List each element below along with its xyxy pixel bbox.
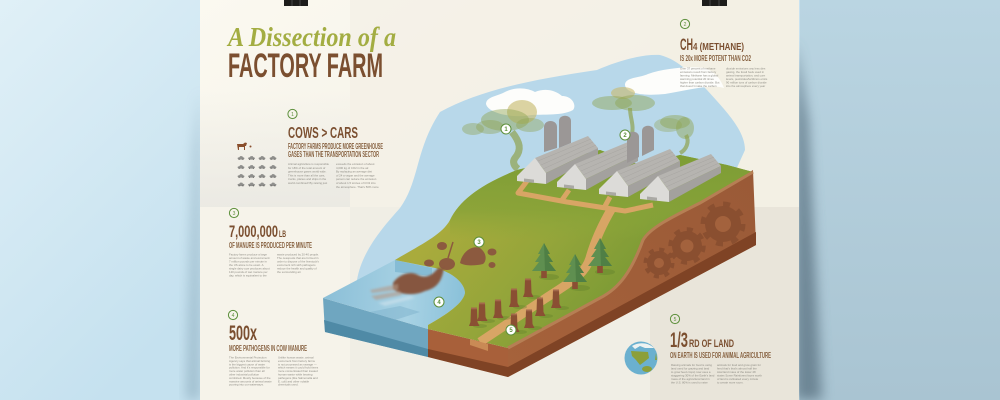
heading bbox=[680, 35, 744, 54]
section 1: cows vs cars bbox=[237, 109, 383, 189]
body text: Over 37 percent of methane bbox=[680, 66, 715, 70]
body text: order to dispose of the livestock's bbox=[277, 260, 320, 264]
gear small bbox=[646, 250, 672, 276]
marker 5 bbox=[506, 325, 516, 335]
body text: 120 pounds of wet manure per bbox=[229, 270, 268, 274]
body text: pouring into our waterways. bbox=[229, 383, 264, 387]
smoke plume 1 bbox=[462, 100, 544, 169]
blue sky blob bbox=[357, 55, 745, 300]
silo 3 bbox=[627, 132, 639, 163]
body text: chemicals used. bbox=[278, 383, 299, 387]
gears bbox=[646, 204, 743, 276]
body text: total land mass of the lower 48 bbox=[717, 370, 756, 374]
body text: more concentrated than treated bbox=[278, 369, 318, 373]
smoke plume 2 bbox=[592, 87, 655, 134]
body text: the U.S. 80% is used to raise bbox=[671, 380, 708, 384]
soil front face bbox=[428, 329, 508, 377]
body text: amount of waste and excrement: bbox=[229, 256, 270, 260]
marker 5: 5 bbox=[509, 328, 513, 334]
number badge 5: 5 bbox=[674, 317, 677, 323]
body text: is not processed as sewage — bbox=[278, 362, 317, 366]
heading bbox=[670, 329, 734, 352]
number badge 4: 4 bbox=[232, 313, 235, 319]
body text: warming potential 20 times bbox=[680, 77, 714, 81]
body text: gasing, the fossil fuels used in bbox=[726, 70, 764, 74]
body text: the US alone to be exact. A bbox=[229, 263, 264, 267]
body text: that doesn't make the carbon bbox=[680, 84, 717, 88]
title bbox=[226, 22, 396, 85]
barn 2 bbox=[557, 142, 638, 190]
body text: which means it could hold times bbox=[278, 366, 319, 370]
manure piles bbox=[424, 242, 496, 270]
body text: land used for grazing and land bbox=[671, 366, 710, 370]
barn 1 bbox=[517, 136, 598, 184]
heading: CH bbox=[680, 35, 693, 54]
body text: pollution. And it's responsible for bbox=[229, 366, 270, 370]
body text: The cesspools that are formed in bbox=[277, 256, 319, 260]
body text: Factory farms produce a large bbox=[229, 252, 267, 256]
body text: pathogens (like Salmonella and bbox=[278, 376, 318, 380]
body text bbox=[680, 66, 768, 88]
tree stumps bbox=[469, 278, 569, 334]
body text bbox=[229, 356, 319, 387]
barn 4 bbox=[640, 154, 721, 202]
body text: The Environmental Protection bbox=[229, 356, 266, 360]
title main line: FACTORY FARM bbox=[228, 47, 383, 85]
body text: person can reduce the emission bbox=[336, 177, 377, 181]
icon: cow bbox=[237, 142, 247, 150]
body text: excrement from factory farms bbox=[278, 359, 316, 363]
body text: states Some Rainforest faces worth bbox=[717, 374, 762, 378]
heading: LB bbox=[279, 229, 286, 239]
body text: exceeds the emission of about bbox=[336, 162, 374, 166]
body text: excrement rich with pathogens bbox=[277, 263, 316, 267]
body text: farming. Methane has a global bbox=[680, 74, 719, 78]
silos rear bbox=[544, 116, 571, 152]
title script line: A Dissection of a bbox=[226, 22, 396, 52]
silo 1 bbox=[544, 121, 557, 152]
body text: human waste while bearing bbox=[278, 372, 313, 376]
body text: world combined! By raising just bbox=[288, 181, 327, 185]
text: FACTORY FARMS PRODUCE MORE GREENHOUSE bbox=[288, 142, 383, 151]
body text: This is more than all the cars, bbox=[288, 173, 325, 177]
subheading bbox=[288, 142, 383, 159]
body text: to create more room. bbox=[717, 380, 744, 384]
subheading: GASES THAN THE TRANSPORTATION SECTOR bbox=[288, 150, 379, 159]
section 3: manure volume bbox=[229, 208, 320, 278]
icon: grid of cars bbox=[238, 156, 276, 186]
marker 2 bbox=[620, 130, 630, 140]
body text: emissions result from factory bbox=[680, 70, 717, 74]
marker 3 bbox=[474, 237, 484, 247]
terrain block bbox=[323, 87, 756, 377]
heading: 500x bbox=[229, 322, 257, 345]
body text bbox=[288, 162, 379, 189]
body text: day, which is equivalent to the bbox=[229, 274, 267, 278]
grass surface bbox=[395, 150, 753, 348]
body text: combined. Mostly because of the bbox=[229, 376, 271, 380]
body text: single dairy cow produces about bbox=[229, 266, 270, 270]
body text: other industrial pollution bbox=[229, 372, 259, 376]
gear medium bbox=[670, 230, 704, 262]
body text: dioxide emissions any less dire: bbox=[726, 66, 766, 70]
soil right face bbox=[508, 170, 756, 377]
section 2: methane bbox=[680, 19, 768, 88]
body text: animals for food and grow grain for bbox=[717, 363, 761, 367]
soil edge strip bbox=[508, 172, 753, 348]
poster sheet bbox=[200, 0, 799, 400]
smoke plume 3 bbox=[654, 115, 694, 153]
body text: is the biggest cause of water bbox=[229, 362, 265, 366]
heading: COWS > CARS bbox=[288, 125, 358, 142]
body text: waste produced by 20-40 people. bbox=[277, 252, 319, 256]
smoke plumes bbox=[462, 87, 694, 169]
body text: trucks, planes and ships in the bbox=[288, 177, 327, 181]
heading: 1/3 bbox=[670, 329, 688, 352]
body text: of about 1.5 tonnes of CO2 into bbox=[336, 181, 376, 185]
body text: more water pollution than all bbox=[229, 369, 265, 373]
marker 1: 1 bbox=[504, 127, 508, 133]
map markers bbox=[434, 124, 630, 335]
marker 3: 3 bbox=[477, 240, 481, 246]
heading: RD OF LAND bbox=[689, 338, 734, 350]
body text: for 18% of the total amount of bbox=[288, 166, 326, 170]
section 5: land use bbox=[624, 314, 771, 384]
pine trees bbox=[532, 238, 615, 291]
body text bbox=[671, 363, 762, 384]
heading: 4 (METHANE) bbox=[693, 41, 744, 53]
marker 1 bbox=[501, 124, 511, 134]
body text: reduce the health and quality of bbox=[277, 266, 317, 270]
body text: 4,000 kg of CO2 in the air. bbox=[336, 166, 369, 170]
silo 4 bbox=[642, 126, 654, 156]
body text: to grow feed crops) now uses a bbox=[671, 370, 711, 374]
body text: massive amounts of animal waste bbox=[229, 379, 272, 383]
body text: Agency says that animal farming bbox=[229, 359, 271, 363]
body text: Animal agriculture is responsible bbox=[288, 162, 329, 166]
subheading: MORE PATHOGENS IN COW MANURE bbox=[229, 344, 307, 353]
marker 4: 4 bbox=[437, 300, 441, 306]
equals sign bbox=[250, 146, 252, 148]
body text: into the atmosphere every year bbox=[726, 84, 765, 88]
body text: of 24 a vegan and the average bbox=[336, 173, 375, 177]
marker 4 bbox=[434, 297, 444, 307]
section 4: pathogens bbox=[228, 310, 319, 387]
heading: 7,000,000 bbox=[229, 222, 278, 241]
gear large bbox=[703, 204, 743, 244]
body text: Raising animals for food is using bbox=[671, 363, 712, 367]
body text: feed that's that's almost half the bbox=[717, 366, 757, 370]
body text: E. coli) and other volatile bbox=[278, 379, 310, 383]
subheading: ON EARTH IS USED FOR ANIMAL AGRICULTURE bbox=[670, 351, 771, 360]
number badge 2: 2 bbox=[684, 22, 687, 28]
silo 2 bbox=[559, 116, 571, 148]
subheading: IS 20x MORE POTENT THAN CO2 bbox=[680, 54, 751, 63]
number badge 1 bbox=[288, 109, 297, 119]
marker 2: 2 bbox=[623, 133, 627, 139]
body text: staggering 30% of the Earth's land bbox=[671, 374, 715, 378]
body text: Unlike human waste, animal bbox=[278, 356, 314, 360]
body text: of land is cultivated every minute bbox=[717, 377, 759, 381]
body text: 7 million pounds per minute in bbox=[229, 260, 267, 264]
water side face bbox=[323, 298, 428, 357]
body text: greenhouse gases world wide. bbox=[288, 170, 327, 174]
body text: levels, pesticides/fertilizers emits bbox=[726, 77, 768, 81]
subheading: OF MANURE IS PRODUCED PER MINUTE bbox=[229, 241, 312, 250]
body text: 90 million tons of carbon dioxide bbox=[726, 80, 767, 84]
body text: higher than carbon dioxide. But bbox=[680, 80, 720, 84]
clouds bbox=[486, 67, 724, 116]
number badge 5 bbox=[670, 314, 680, 324]
grass shading near barns bbox=[450, 150, 753, 240]
body text: mass of the agricultural land in bbox=[671, 377, 710, 381]
body text bbox=[229, 252, 320, 278]
number badge 3: 3 bbox=[233, 211, 236, 217]
binder clip right bbox=[702, 0, 727, 6]
manure sludge in the water bbox=[370, 268, 444, 306]
water surface bbox=[323, 260, 465, 329]
body text: the atmosphere. That's 50% more bbox=[336, 185, 379, 189]
icon: globe bbox=[624, 342, 658, 374]
barn 3 bbox=[599, 149, 680, 197]
body text: By replacing an average diet bbox=[336, 170, 372, 174]
binder clip left bbox=[284, 0, 308, 6]
dirt road bbox=[480, 181, 653, 342]
body text: animal transportation, and corn bbox=[726, 74, 766, 78]
number badge 1: 1 bbox=[291, 112, 294, 118]
body text: the surrounding air. bbox=[277, 270, 302, 274]
